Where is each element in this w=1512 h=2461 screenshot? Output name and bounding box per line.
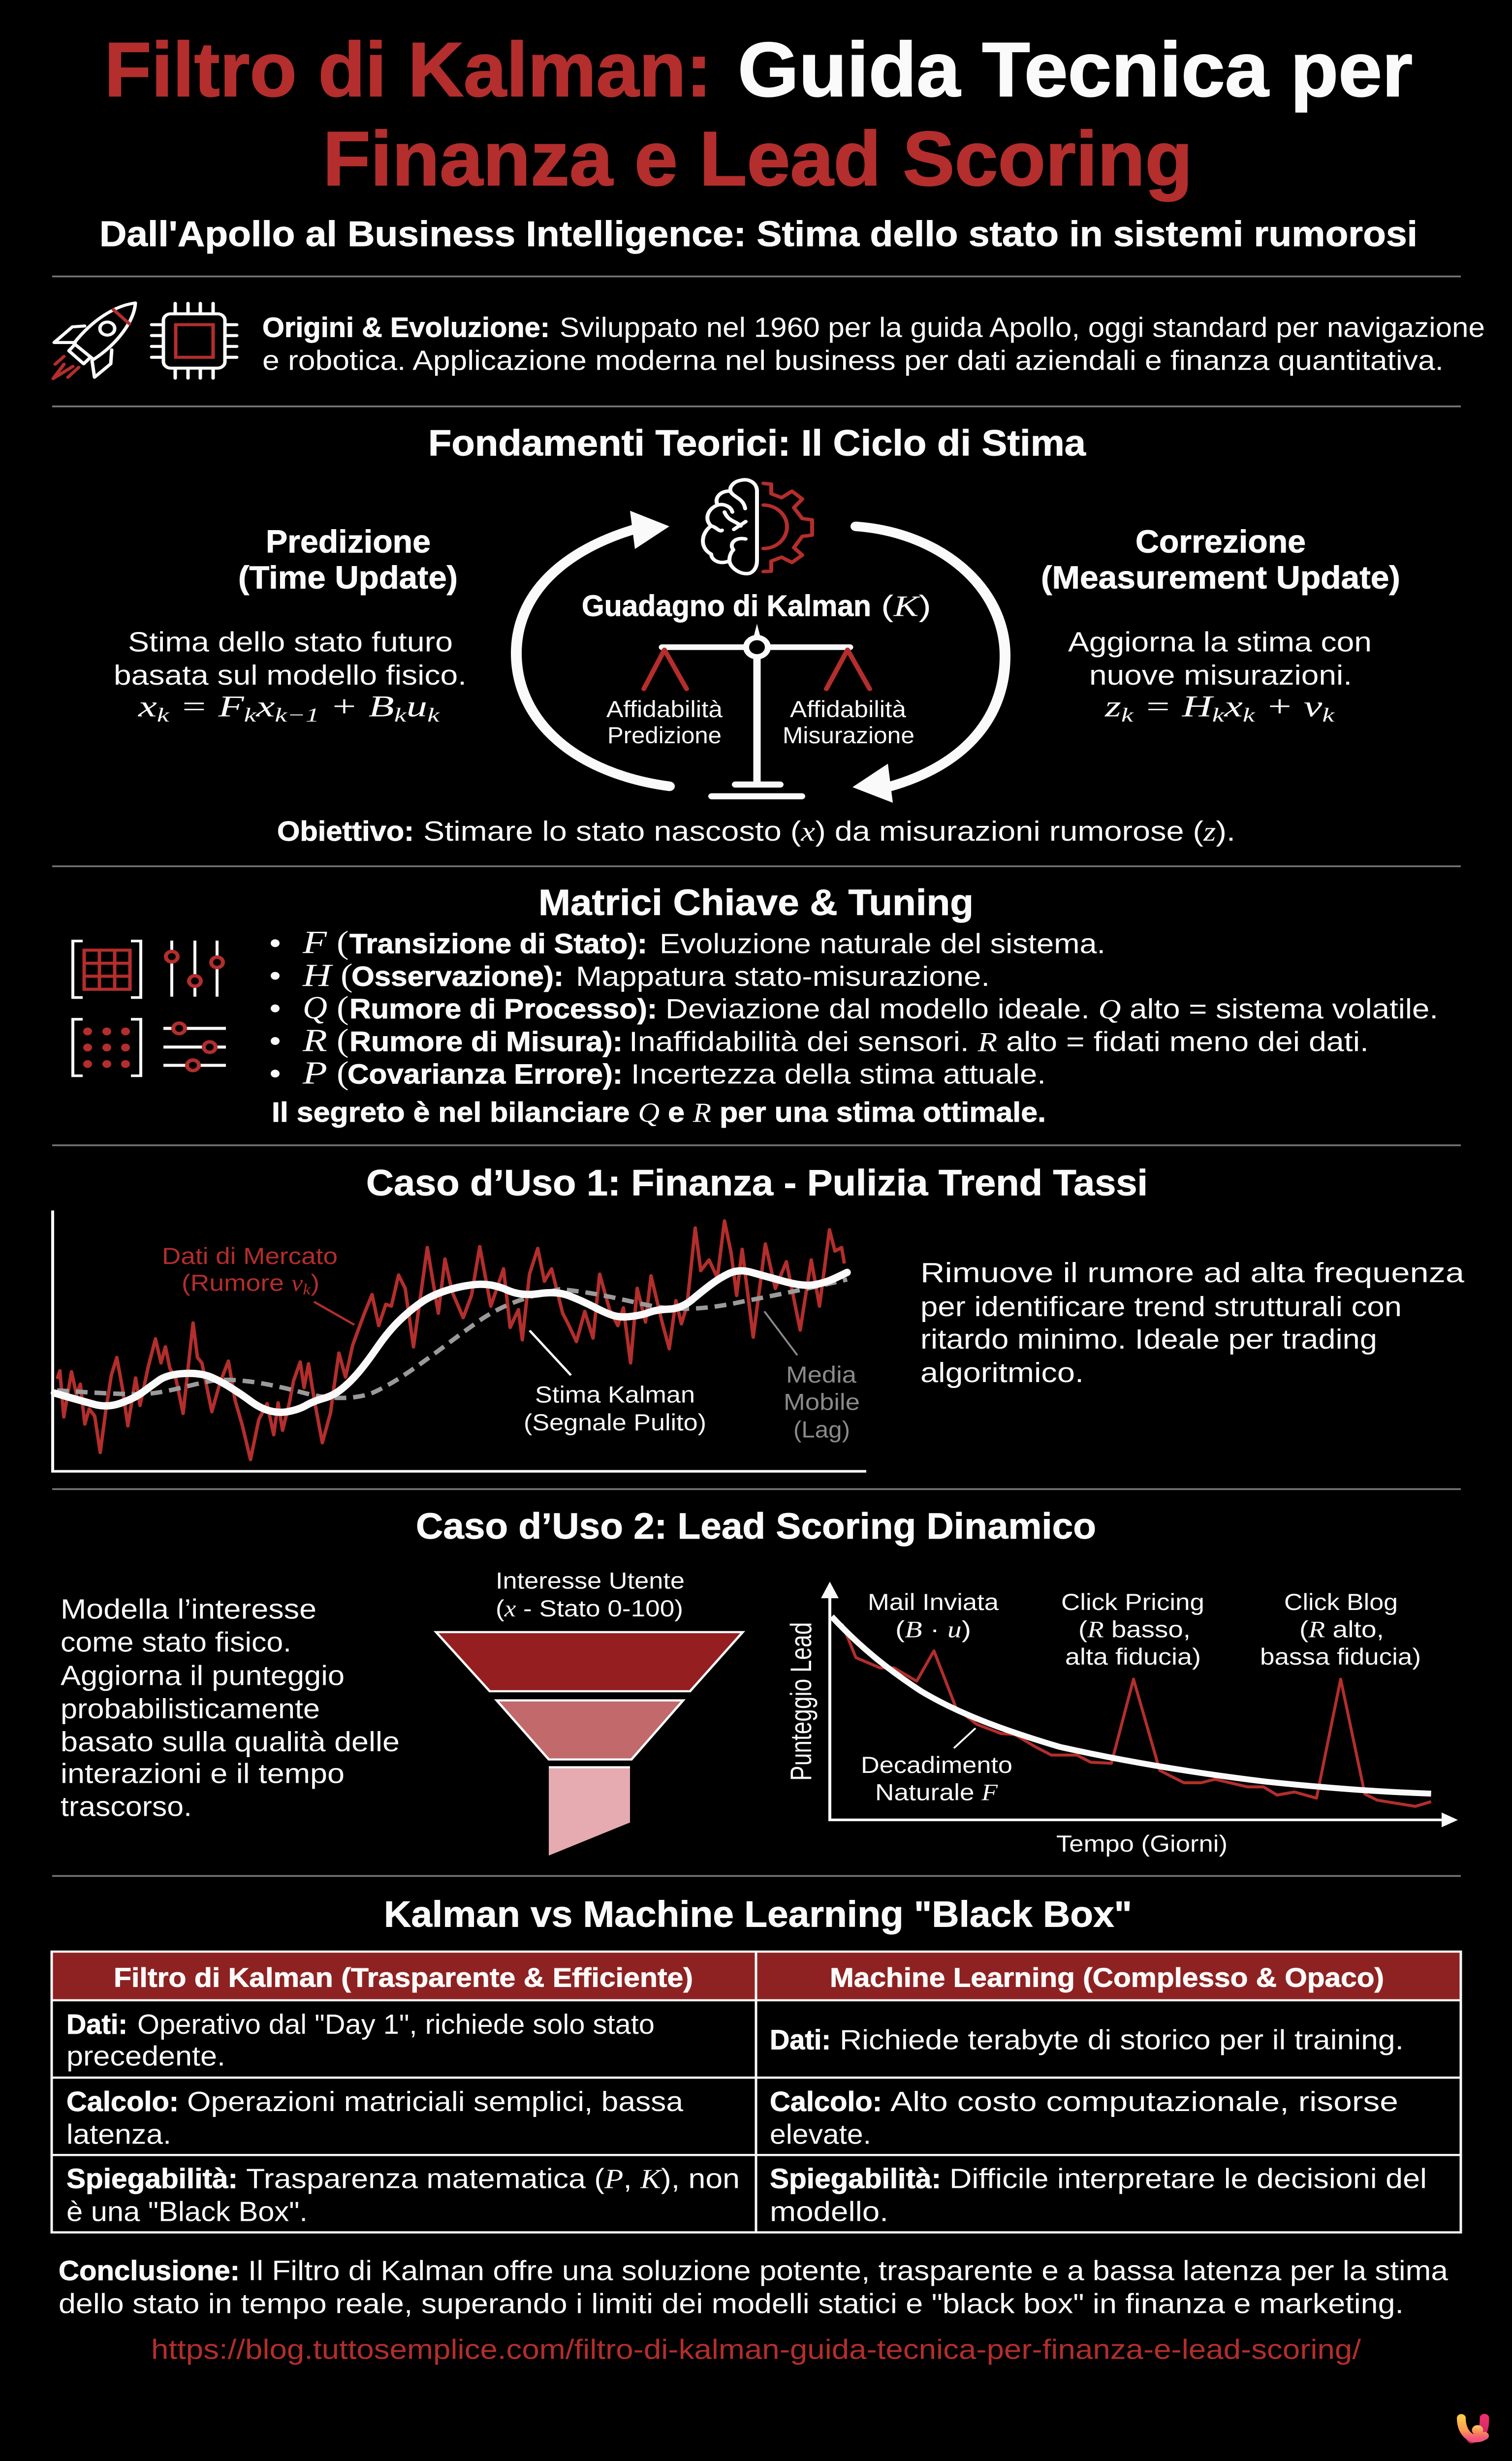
chart axes [53, 1210, 866, 1471]
icons: matrices and sliders [73, 941, 226, 1076]
icon: microchip [152, 303, 237, 378]
title: Guida Tecnica per [738, 27, 1413, 113]
chart: lead score over time [785, 1582, 1458, 1857]
text: origins and evolution: e robotica. Applicazione moderna nel business per dati aziendali e finanza quantitativa. [262, 345, 1444, 376]
row: computation: Alto costo computazionale, risorse [890, 2086, 1398, 2117]
text: lead scoring description: interazioni e il tempo [61, 1758, 345, 1789]
icon: brain and gear [703, 480, 812, 573]
panel: prediction: Predizione [266, 523, 431, 559]
row: computation: Calcolo: [770, 2086, 882, 2117]
panel: prediction: basata sul modello fisico. [114, 659, 467, 691]
heading: key matrices: Matrici Chiave & Tuning [538, 882, 974, 923]
list item: Q: Q [303, 990, 327, 1026]
icon: horizontal sliders [163, 1023, 226, 1071]
source url: https://blog.tuttosemplice.com/filtro-di-kalman-guida-tecnica-per-finanza-e-lead-scoring/ [151, 2334, 1361, 2365]
list item: P [271, 1055, 1046, 1091]
label: Kalman estimate: (Segnale Pulito) [524, 1409, 706, 1436]
funnel tier: top [436, 1632, 743, 1691]
list: key matrices [271, 925, 1438, 1128]
list item: P: Covarianza Errore): [347, 1058, 623, 1090]
text: lead scoring description [61, 1593, 400, 1822]
title [104, 27, 1413, 202]
label: measurement reliability [783, 696, 914, 748]
text: lead scoring description: trascorso. [61, 1791, 192, 1822]
conclusion: dello stato in tempo reale, superando i limiti dei modelli statici e "black box" in finanza e marketing. [59, 2288, 1404, 2319]
label: market data: ) [311, 1270, 319, 1296]
row: computation [66, 2086, 1398, 2150]
formula: measurement: z [1105, 690, 1118, 723]
text: finance description: algoritmico. [920, 1357, 1084, 1388]
label: Kalman gain: Guadagno di Kalman [582, 589, 871, 622]
formula: measurement: H [1182, 690, 1207, 723]
list item: Q: Deviazione dal modello ideale. Q alto = sistema volatile. [665, 993, 1438, 1025]
row: explainability: Spiegabilità: [66, 2163, 238, 2194]
objective line: Stimare lo stato nascosto (x) da misurazioni rumorose (z). [423, 815, 1235, 847]
row: data: Richiede terabyte di storico per il training. [840, 2024, 1404, 2055]
formula: measurement: k [1243, 704, 1256, 726]
arrow: gain to correction [852, 526, 1005, 803]
chart axes [821, 1582, 1458, 1827]
series: observed score [842, 1624, 1431, 1806]
formula: state prediction: u [407, 690, 427, 723]
list item: H: Mappatura stato-misurazione. [576, 960, 990, 992]
label: moving average [764, 1311, 860, 1443]
label: prediction reliability: Predizione [607, 722, 722, 748]
list item: Q [271, 990, 1438, 1026]
row: data: Operativo dal "Day 1", richiede solo stato [137, 2008, 655, 2040]
heading: use case 1: Caso d’Uso 1: Finanza - Pulizia Trend Tassi [366, 1162, 1148, 1203]
formula: measurement: k [1121, 704, 1134, 726]
funnel label [496, 1568, 685, 1622]
annotation: natural decay: Decadimento [861, 1752, 1012, 1778]
annotation: click blog: Click Blog [1284, 1589, 1398, 1615]
conclusion [59, 2255, 1448, 2319]
list item: F: Evoluzione naturale del sistema. [660, 928, 1105, 959]
annotation: click pricing [1061, 1589, 1204, 1670]
label: Kalman estimate [524, 1330, 706, 1436]
series: noisy market data [57, 1221, 845, 1459]
panel: correction: Aggiorna la stima con [1068, 626, 1372, 658]
row: data: Dati: [66, 2008, 127, 2040]
list item: F: Transizione di Stato): [349, 928, 647, 959]
label: Kalman estimate: Stima Kalman [535, 1382, 695, 1408]
annotation: click pricing: (R basso, [1078, 1616, 1191, 1643]
heading: Kalman vs machine learning: Kalman vs Machine Learning "Black Box" [384, 1893, 1132, 1935]
label: moving average: Mobile [784, 1389, 860, 1415]
text: finance description [920, 1257, 1464, 1388]
annotation: mail sent [868, 1589, 999, 1643]
list item: H: ( [341, 958, 353, 993]
funnel tier: middle [497, 1701, 683, 1760]
panel: prediction: Stima dello stato futuro [128, 626, 453, 658]
funnel label: (x - Stato 0-100) [496, 1595, 683, 1622]
list item: R: Rumore di Misura): [349, 1026, 623, 1057]
label: prediction reliability [606, 696, 723, 748]
text: origins and evolution [262, 312, 1485, 376]
objective line: Obiettivo: [277, 815, 414, 847]
text: lead scoring description: probabilisticamente [61, 1693, 320, 1724]
heading: use case 2: Caso d’Uso 2: Lead Scoring Dinamico [416, 1506, 1096, 1546]
text: finance description: ritardo minimo. Ideale per trading [920, 1324, 1377, 1355]
funnel label: Interesse Utente [496, 1568, 685, 1594]
table header: Machine Learning (Complesso & Opaco) [830, 1963, 1384, 1993]
panel: correction: nuove misurazioni. [1089, 659, 1352, 691]
row: explainability: Trasparenza matematica (P, K), non [246, 2163, 740, 2195]
list item: F: F [302, 925, 328, 961]
label: market data [162, 1243, 354, 1325]
formula: state prediction: x [255, 690, 275, 723]
formula: measurement: + [1255, 690, 1304, 723]
icon: matrix dots [73, 1019, 141, 1076]
title: Finanza e Lead Scoring [323, 116, 1193, 202]
panel: prediction [114, 523, 467, 726]
text: lead scoring description: Modella l’interesse [61, 1593, 316, 1625]
table header [52, 1952, 1461, 2000]
list item: R: Inaffidabilità dei sensori. R alto = fidati meno dei dati. [629, 1026, 1369, 1057]
list item: Q: ( [337, 990, 349, 1026]
row: data [66, 2008, 1404, 2072]
text: finance description: per identificare trend strutturali con [920, 1291, 1402, 1322]
text: finance description: Rimuove il rumore ad alta frequenza [920, 1257, 1464, 1288]
list item: H: H [302, 958, 333, 993]
panel: prediction: (Time Update) [238, 560, 458, 596]
row: explainability: Difficile interpretare le decisioni del [949, 2163, 1427, 2194]
formula: state prediction: x [138, 690, 154, 723]
panel: origins [53, 303, 1485, 379]
list item: F [271, 925, 1105, 961]
formula: state prediction: k−1 [275, 704, 319, 726]
comparison table [52, 1952, 1461, 2233]
diagram: estimation cycle [516, 480, 1005, 803]
list item: P: Incertezza della stima attuale. [631, 1058, 1046, 1090]
formula: state prediction: = [169, 690, 219, 723]
annotation: click blog: (R alto, [1299, 1616, 1384, 1643]
formula: measurement: k [1322, 704, 1335, 726]
text: lead scoring description: Aggiorna il punteggio [61, 1660, 345, 1691]
formula: measurement: k [1212, 704, 1225, 726]
label: measurement reliability: Affidabilità [790, 696, 907, 722]
formula: measurement: x [1224, 690, 1243, 723]
list item: P: P [302, 1055, 327, 1091]
list item: F: ( [337, 925, 349, 961]
row: explainability: modello. [770, 2196, 888, 2227]
axis label: time: Tempo (Giorni) [1056, 1830, 1228, 1857]
list item: R [271, 1023, 1369, 1058]
row: data: Dati: [770, 2024, 831, 2055]
table grid [52, 1952, 1461, 2233]
text: lead scoring description: come stato fisico. [61, 1626, 291, 1658]
row: explainability [66, 2163, 1427, 2227]
formula: measurement: = [1134, 690, 1182, 723]
label: market data: Dati di Mercato [162, 1243, 338, 1269]
annotation: natural decay [861, 1728, 1012, 1806]
list item: P: ( [337, 1055, 349, 1091]
formula: state prediction: + [319, 690, 369, 723]
row: data: precedente. [66, 2040, 225, 2072]
callout: balance Q and R: Il segreto è nel bilanciare Q e R per una stima ottimale. [272, 1097, 1046, 1128]
formula: state prediction: F [219, 690, 239, 723]
series: Kalman estimate [55, 1271, 847, 1412]
panel: correction [1041, 523, 1400, 726]
row: explainability: Spiegabilità: [770, 2163, 941, 2194]
table header: Filtro di Kalman (Trasparente & Efficiente) [114, 1963, 693, 1993]
formula: state prediction: B [369, 690, 390, 723]
formula: measurement: v [1304, 690, 1319, 723]
title: Filtro di Kalman: [104, 27, 712, 113]
logo [1461, 2418, 1484, 2439]
list item: R: ( [337, 1023, 349, 1058]
annotation: click pricing: alta fiducia) [1065, 1643, 1201, 1670]
funnel: user interest [436, 1568, 743, 1856]
label: market data: (Rumore v [182, 1270, 303, 1296]
panel: correction: (Measurement Update) [1041, 560, 1400, 596]
series: moving average [57, 1280, 847, 1398]
heading: theoretical foundations: Fondamenti Teorici: Il Ciclo di Stima [428, 422, 1086, 463]
label: market data: k [303, 1281, 311, 1298]
formula: state prediction: k [244, 704, 256, 726]
row: computation: elevate. [770, 2118, 871, 2150]
arrow: prediction to gain [516, 511, 669, 786]
funnel tier: bottom [549, 1767, 630, 1856]
annotation: click pricing: Click Pricing [1061, 1589, 1204, 1615]
annotation: mail sent: (B · u) [895, 1616, 971, 1643]
axis label: lead score: Punteggio Lead [785, 1622, 818, 1781]
chart: finance trend cleaning [53, 1210, 866, 1471]
icon: vertical sliders [166, 941, 223, 997]
row: explainability: è una "Black Box". [66, 2196, 308, 2227]
label: moving average: (Lag) [793, 1416, 850, 1443]
text: origins and evolution: Origini & Evoluzione: [262, 312, 550, 343]
formula: state prediction: k [427, 704, 440, 726]
label: measurement reliability: Misurazione [783, 722, 914, 748]
icon: matrix grid [73, 941, 141, 998]
label: prediction reliability: Affidabilità [606, 696, 723, 722]
text: lead scoring description: basato sulla qualità delle [61, 1726, 400, 1757]
annotation: natural decay: Naturale F [875, 1779, 998, 1806]
row: computation: Operazioni matriciali semplici, bassa [187, 2086, 683, 2117]
icon: rocket [53, 303, 135, 379]
series: natural decay [832, 1616, 1431, 1794]
formula: state prediction: k [157, 704, 170, 726]
row: computation: Calcolo: [66, 2086, 179, 2117]
list item: H: Osservazione): [351, 960, 564, 992]
subtitle: Dall'Apollo al Business Intelligence: Stima dello stato in sistemi rumorosi [99, 214, 1418, 254]
annotation: click blog [1260, 1589, 1421, 1670]
label: Kalman gain: (K) [881, 589, 931, 622]
list item: Q: Rumore di Processo): [349, 993, 657, 1024]
formula: state prediction: k [394, 704, 407, 726]
annotation: mail sent: Mail Inviata [868, 1589, 999, 1615]
list item: H [271, 958, 990, 993]
list item: R: R [302, 1023, 327, 1058]
conclusion: Conclusione: [59, 2255, 240, 2286]
conclusion: Il Filtro di Kalman offre una soluzione potente, trasparente e a bassa latenza per la stima [248, 2255, 1448, 2286]
annotation: click blog: bassa fiducia) [1260, 1643, 1421, 1670]
panel: correction: Correzione [1135, 523, 1306, 559]
row: computation: latenza. [66, 2118, 171, 2150]
label: moving average: Media [786, 1361, 857, 1388]
icon: balance scale [644, 624, 870, 799]
